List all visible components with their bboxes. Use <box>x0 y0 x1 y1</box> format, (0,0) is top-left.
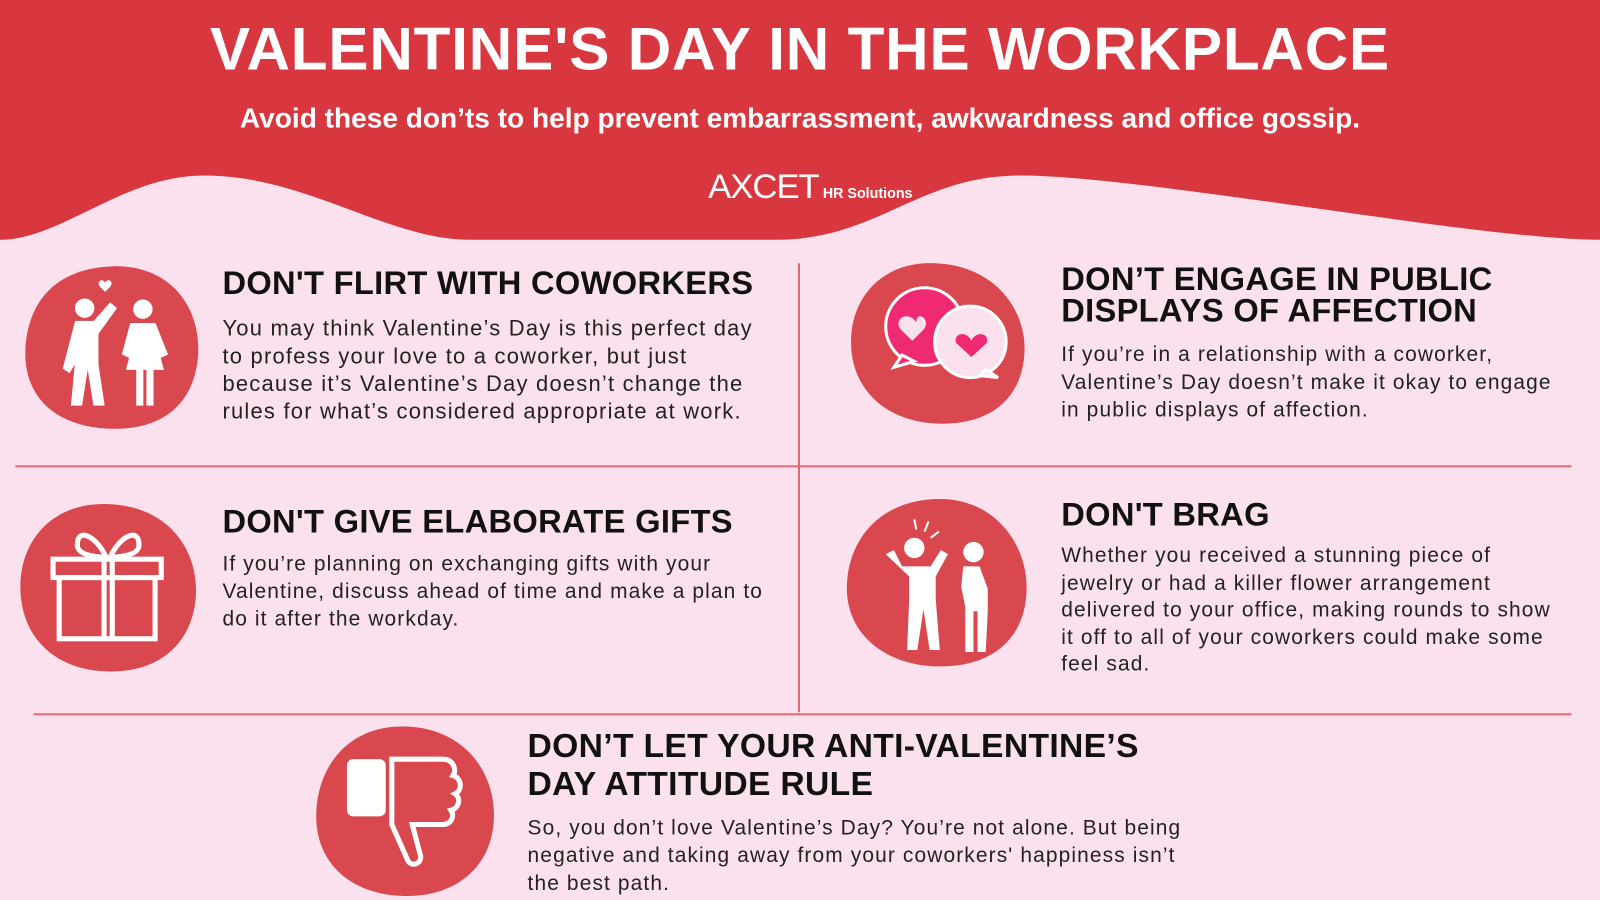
icon: coworkers <box>25 266 198 429</box>
panel: anti-valentine: the best path. <box>528 871 670 895</box>
panel: gifts <box>222 503 763 631</box>
panel: flirt: rules for what’s considered appropriate at work. <box>222 399 742 423</box>
panel: PDA <box>1061 260 1552 421</box>
panel: anti-valentine: So, you don’t love Valentine’s Day? You’re not alone. But being <box>528 816 1181 840</box>
icon: brag <box>846 499 1027 666</box>
panel: PDA: Valentine’s Day doesn’t make it okay to engage <box>1061 370 1552 394</box>
panel: brag: feel sad. <box>1061 652 1150 676</box>
subtitle: Avoid these don’ts to help prevent embarrassment, awkwardness and office gossip. <box>240 102 1360 134</box>
panel: anti-valentine: DAY ATTITUDE RULE <box>528 764 873 802</box>
panel: brag: it off to all of your coworkers could make some <box>1061 625 1544 648</box>
header background <box>0 0 1600 240</box>
panel: brag: Whether you received a stunning piece of <box>1061 544 1491 567</box>
panel: flirt <box>222 264 753 423</box>
icon: speech bubbles <box>851 263 1025 424</box>
panel: gifts: DON'T GIVE ELABORATE GIFTS <box>222 503 733 540</box>
icon: thumbs down <box>316 726 494 896</box>
icon: gift <box>20 504 196 672</box>
panel: brag: DON'T BRAG <box>1061 496 1270 533</box>
logo: AXCET HR Solutions <box>708 167 912 206</box>
panel: flirt: because it’s Valentine’s Day doesn’t change the <box>222 371 743 396</box>
panel: anti-valentine <box>528 727 1181 895</box>
title: VALENTINE'S DAY IN THE WORKPLACE <box>210 15 1390 83</box>
panel: PDA: DON’T ENGAGE IN PUBLIC <box>1061 260 1492 297</box>
panel: anti-valentine: DON’T LET YOUR ANTI-VALENTINE’S <box>528 727 1139 764</box>
panel: flirt: to profess your love to a coworker, but just <box>222 344 687 368</box>
panel: brag <box>1060 496 1551 676</box>
panel: flirt: You may think Valentine’s Day is this perfect day <box>222 316 753 341</box>
panel: PDA: If you’re in a relationship with a coworker, <box>1061 343 1493 366</box>
panel: brag: jewelry or had a killer flower arrangement <box>1061 571 1491 594</box>
panel: PDA: DISPLAYS OF AFFECTION <box>1061 292 1477 329</box>
panel: PDA: in public displays of affection. <box>1061 398 1369 421</box>
panel: gifts: Valentine, discuss ahead of time and make a plan to <box>222 580 763 603</box>
panel: gifts: do it after the workday. <box>222 607 459 631</box>
panel: brag: delivered to your office, making rounds to show <box>1061 598 1551 621</box>
panel: gifts: If you’re planning on exchanging gifts with your <box>222 552 711 576</box>
panel: anti-valentine: negative and taking away from your coworkers' happiness isn’t <box>528 844 1176 867</box>
panel: flirt: DON'T FLIRT WITH COWORKERS <box>222 264 753 301</box>
